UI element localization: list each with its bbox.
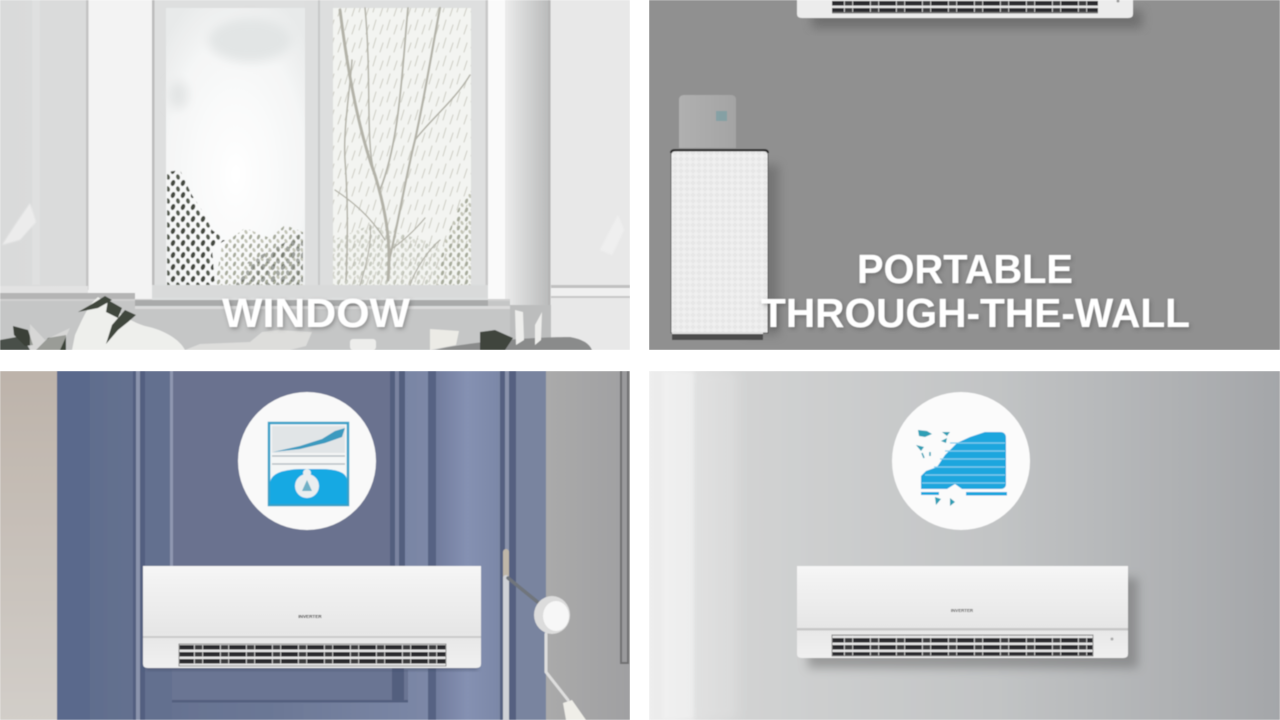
wall-mounted split unit: [143, 566, 481, 670]
panel: portable and through-the-wall: [649, 0, 1280, 350]
right window pane with bare tree: [333, 8, 471, 285]
label: THROUGH-THE-WALL: THROUGH-THE-WALL: [761, 290, 1190, 336]
decor: white flowers, plants, vases: [0, 296, 592, 350]
panel: split unit on blue door: [0, 371, 630, 720]
blue panelled door: [57, 371, 546, 720]
label: PORTABLE: PORTABLE: [857, 246, 1073, 292]
gray wall with curtain strip: [649, 371, 1280, 720]
portable air conditioner: [671, 95, 779, 340]
icon badge: window unit: [238, 392, 376, 530]
panel: split unit on gray wall: [649, 371, 1280, 720]
panel: window air conditioner: [0, 0, 630, 350]
window frame: [152, 0, 488, 300]
room wall: [0, 0, 630, 350]
unit logo: INVERTER: [298, 614, 322, 619]
floor lamp: [506, 552, 586, 720]
label: WINDOW: WINDOW: [222, 290, 410, 336]
wall-mounted split unit: [797, 566, 1138, 668]
left window pane with bush: [166, 8, 305, 285]
icon badge: split unit: [892, 392, 1030, 530]
bench: [0, 299, 551, 350]
gray wall: [649, 0, 1280, 350]
wall-mounted unit, cropped at top: [797, 0, 1142, 28]
beige wall and gray wall: [0, 371, 630, 720]
unit logo: INVERTER: [951, 608, 974, 613]
